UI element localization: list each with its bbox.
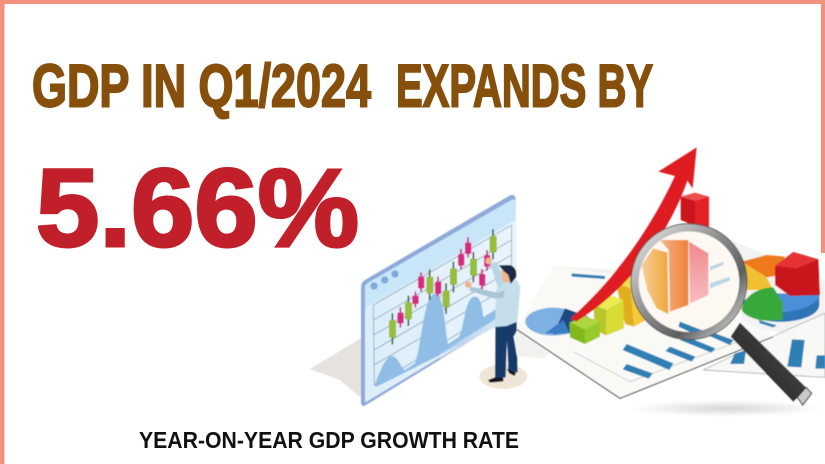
small pie on sheet <box>525 308 588 336</box>
illustration: charts under magnifying glass <box>513 147 825 417</box>
headline growth figure: 5.66% <box>36 147 359 270</box>
face <box>501 268 510 283</box>
title: right part: EXPANDS BY <box>396 52 653 120</box>
reaching arm <box>469 287 505 298</box>
report sheets <box>513 237 825 398</box>
lens ring <box>635 228 743 336</box>
shirt <box>495 280 520 327</box>
raised arm <box>490 262 504 290</box>
green cube <box>569 316 600 344</box>
border: top <box>0 0 825 4</box>
magnified middle bar <box>660 240 688 312</box>
caption: YEAR-ON-YEAR GDP GROWTH RATE <box>139 427 519 453</box>
title: left part: GDP IN Q1/2024 <box>32 52 371 120</box>
area chart <box>374 293 497 387</box>
handle tip <box>797 387 812 405</box>
floor spot <box>479 364 527 389</box>
border: left <box>0 0 4 464</box>
shoes <box>488 369 516 383</box>
magnifying glass <box>631 224 812 405</box>
panel fade near figure <box>440 307 527 407</box>
ground shadow <box>630 400 823 417</box>
handle <box>731 323 807 402</box>
red bar behind lens <box>681 193 709 229</box>
pie chart <box>742 252 820 322</box>
report bars <box>572 273 825 379</box>
magnified left bar <box>642 248 668 314</box>
trousers <box>495 321 518 379</box>
analyst figure <box>465 258 527 389</box>
growth arrow <box>571 147 697 322</box>
illustration: analyst at stock chart <box>310 195 527 407</box>
panel shadow <box>310 337 363 400</box>
lens interior <box>638 231 740 332</box>
border: right <box>821 0 825 253</box>
chart grid <box>373 225 512 386</box>
magnified pink bar <box>689 242 708 303</box>
chart screen <box>361 195 527 407</box>
yellow-green cube <box>593 295 624 335</box>
gold bar <box>616 276 646 327</box>
hands <box>465 281 472 288</box>
candlesticks <box>389 229 497 344</box>
hair <box>499 265 516 284</box>
